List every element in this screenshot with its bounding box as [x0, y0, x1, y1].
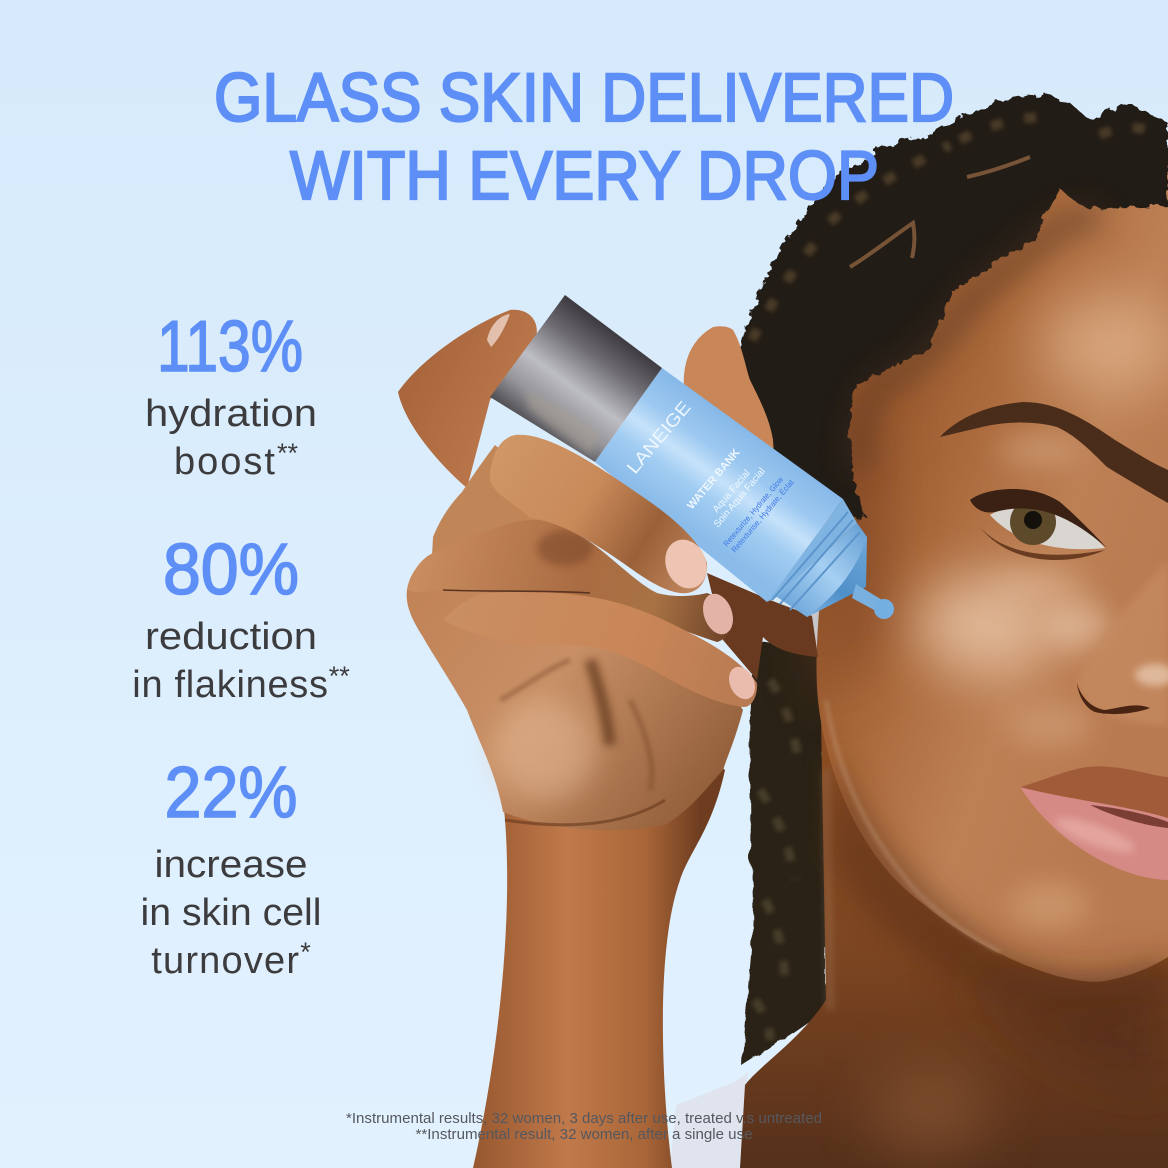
footnotes [346, 1111, 822, 1143]
neck [740, 660, 1168, 1168]
stat: 22% increase in skin cell turnover: 22% [164, 753, 298, 833]
stat: 113% hydration boost: hydration [145, 393, 317, 435]
product label: WATER BANK [685, 447, 743, 512]
product label [623, 397, 796, 554]
hair partings [850, 157, 1030, 267]
stat: 113% hydration boost: boost [174, 441, 277, 483]
cheek highlights [915, 575, 1055, 675]
nose [1077, 560, 1168, 725]
stat: 80% reduction in flakiness: reduction [145, 616, 317, 658]
eye [970, 489, 1107, 560]
stat: 22% increase in skin cell turnover: turnover [151, 940, 300, 982]
palm highlight [495, 700, 595, 800]
title: WITH EVERY DROP [290, 137, 879, 214]
braid highlights [755, 680, 800, 1040]
nozzle ridges [772, 512, 860, 610]
stat: 80% reduction in flakiness: 80% [163, 530, 299, 610]
footnotes: *Instrumental results, 32 women, 3 days after use, treated v.s untreated [346, 1111, 822, 1127]
stat: 80% reduction in flakiness: ** [329, 661, 350, 691]
face [816, 150, 1168, 982]
hand and arm [398, 310, 818, 1168]
hair braid behind neck [742, 640, 826, 1066]
palm crease [590, 660, 610, 745]
knuckle shadow [537, 530, 593, 566]
nozzle cone [807, 537, 867, 617]
stat: 80% reduction in flakiness: in flakiness [132, 664, 329, 706]
stat: 80% reduction in flakiness [132, 530, 350, 706]
back of hand [432, 445, 570, 570]
stat: 113% hydration boost [145, 307, 317, 483]
model portrait [670, 95, 1168, 1168]
cap sheen [525, 390, 600, 455]
nozzle tip [874, 599, 894, 619]
neck rim light [826, 770, 830, 1010]
product label: LANEIGE [623, 397, 695, 478]
arm [473, 700, 725, 1168]
thumb nail [487, 314, 510, 347]
stat: 113% hydration boost: 113% [157, 307, 303, 387]
braid gold highlights [752, 117, 1160, 340]
thumb [398, 310, 537, 488]
jaw rim light [826, 700, 1000, 952]
nozzle shoulder [777, 523, 867, 617]
temple shadow [820, 420, 890, 700]
fingers over bottle [407, 435, 760, 707]
stat: 22% increase in skin cell turnover [140, 753, 322, 982]
index finger [490, 435, 707, 593]
lips [1020, 766, 1168, 880]
stat: 113% hydration boost: ** [277, 438, 298, 468]
skin behind bottle [707, 573, 818, 680]
title [214, 59, 954, 214]
product label: Aqua Facial [711, 468, 753, 515]
stat: 22% increase in skin cell turnover: * [300, 937, 311, 967]
index fingernail [658, 533, 714, 595]
footnotes: **Instrumental result, 32 women, after a single use [416, 1127, 752, 1143]
bottle cap [490, 295, 662, 462]
forehead highlight [1040, 295, 1168, 395]
finger crease [443, 590, 590, 593]
ring finger [443, 592, 757, 707]
stat: 22% increase in skin cell turnover: increase [154, 844, 308, 886]
product label: Retexturize, Hydrate, Glow [722, 475, 785, 548]
white top [670, 1072, 748, 1168]
palm [407, 550, 743, 830]
product: bottle [490, 295, 894, 619]
hairline fade [860, 218, 1100, 470]
product label: Retexturise, Hydrate, Éclat [730, 477, 796, 554]
neck highlight [870, 1065, 990, 1155]
ring fingernail [724, 663, 760, 703]
eyebrow [940, 402, 1168, 503]
jaw shadow [830, 740, 1168, 1012]
title: GLASS SKIN DELIVERED [214, 59, 954, 136]
middle finger [407, 520, 733, 642]
hair mass [740, 95, 1168, 520]
stat: 22% increase in skin cell turnover: in skin cell [140, 892, 322, 934]
finger behind bottle [684, 326, 775, 470]
under chin dark [950, 960, 1168, 1090]
middle fingernail [698, 589, 738, 639]
bottle body [595, 368, 843, 602]
bottle neck ridges [767, 499, 857, 602]
product label: Soin Aqua Facial [712, 466, 768, 530]
